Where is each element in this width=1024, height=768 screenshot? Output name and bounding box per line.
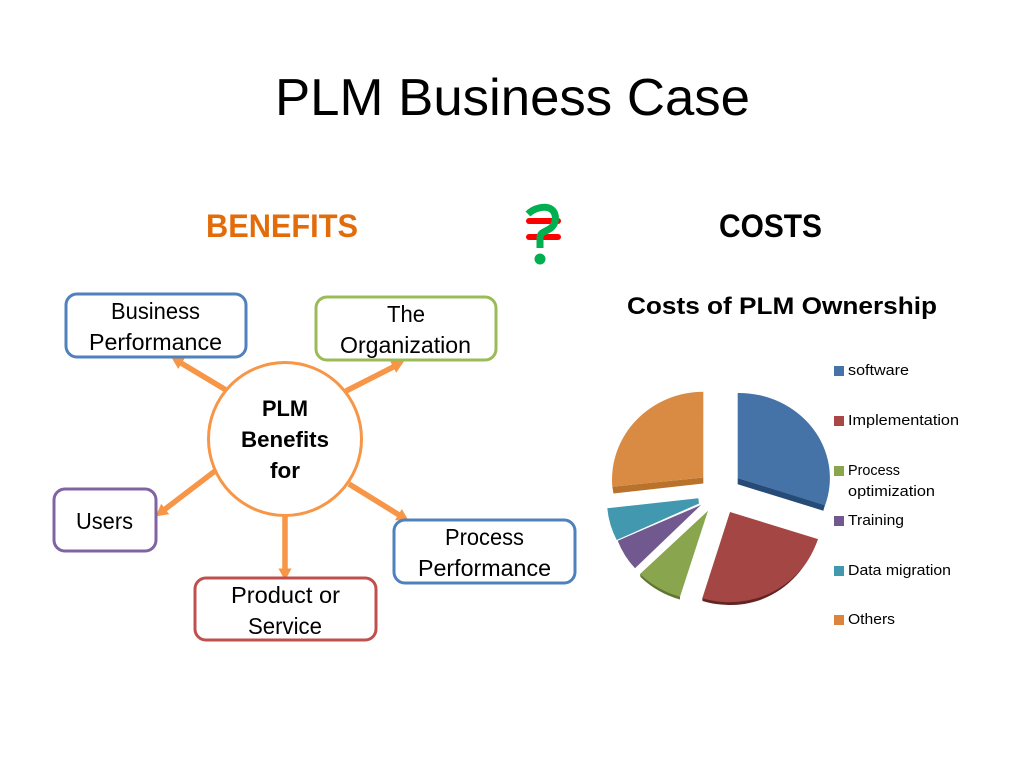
node: process performance <box>394 520 575 583</box>
node: product or service: Product or <box>231 582 340 608</box>
heading: benefits: BENEFITS <box>206 208 358 244</box>
arrow: to the organization <box>346 364 399 391</box>
node: central circle: for <box>270 458 300 483</box>
legend: software <box>848 363 909 379</box>
title: PLM Business Case <box>275 69 750 127</box>
node: the organization <box>316 297 496 360</box>
node: business performance: Performance <box>89 329 222 355</box>
node: process performance: Process <box>445 524 524 550</box>
arrow: to process performance <box>349 484 404 518</box>
slice: software <box>738 393 830 511</box>
slice: others <box>612 392 703 494</box>
legend: Implementation <box>848 413 959 429</box>
arrow: to users <box>160 471 215 513</box>
legend <box>834 363 959 628</box>
legend: Process <box>848 463 900 479</box>
node: product or service: Service <box>248 613 322 639</box>
chart title: Costs of PLM Ownership <box>627 293 937 320</box>
pie chart <box>607 392 830 605</box>
node: product or service <box>195 578 376 640</box>
legend: optimization <box>848 484 935 500</box>
arrow: to product or service <box>282 516 288 575</box>
node: central circle: Benefits <box>241 427 329 452</box>
legend: Others <box>848 612 895 628</box>
node: business performance <box>66 294 246 357</box>
node: the organization: The <box>387 301 425 327</box>
node: business performance: Business <box>111 298 200 324</box>
slice: implementation <box>702 512 818 605</box>
legend: Data migration <box>848 563 951 579</box>
icon: not-equal question mark <box>526 207 561 264</box>
heading: costs: COSTS <box>719 208 822 244</box>
node: central circle <box>208 362 362 516</box>
slice: process optimization <box>640 511 708 600</box>
arrow: to business performance <box>176 360 226 390</box>
slice: data migration <box>607 498 699 540</box>
node: users <box>54 489 156 551</box>
node: central circle: PLM <box>262 396 308 421</box>
legend: Training <box>848 513 904 529</box>
node: process performance: Performance <box>418 555 551 581</box>
slice: training <box>618 505 701 568</box>
node: users: Users <box>76 508 133 534</box>
node: the organization: Organization <box>340 332 471 358</box>
